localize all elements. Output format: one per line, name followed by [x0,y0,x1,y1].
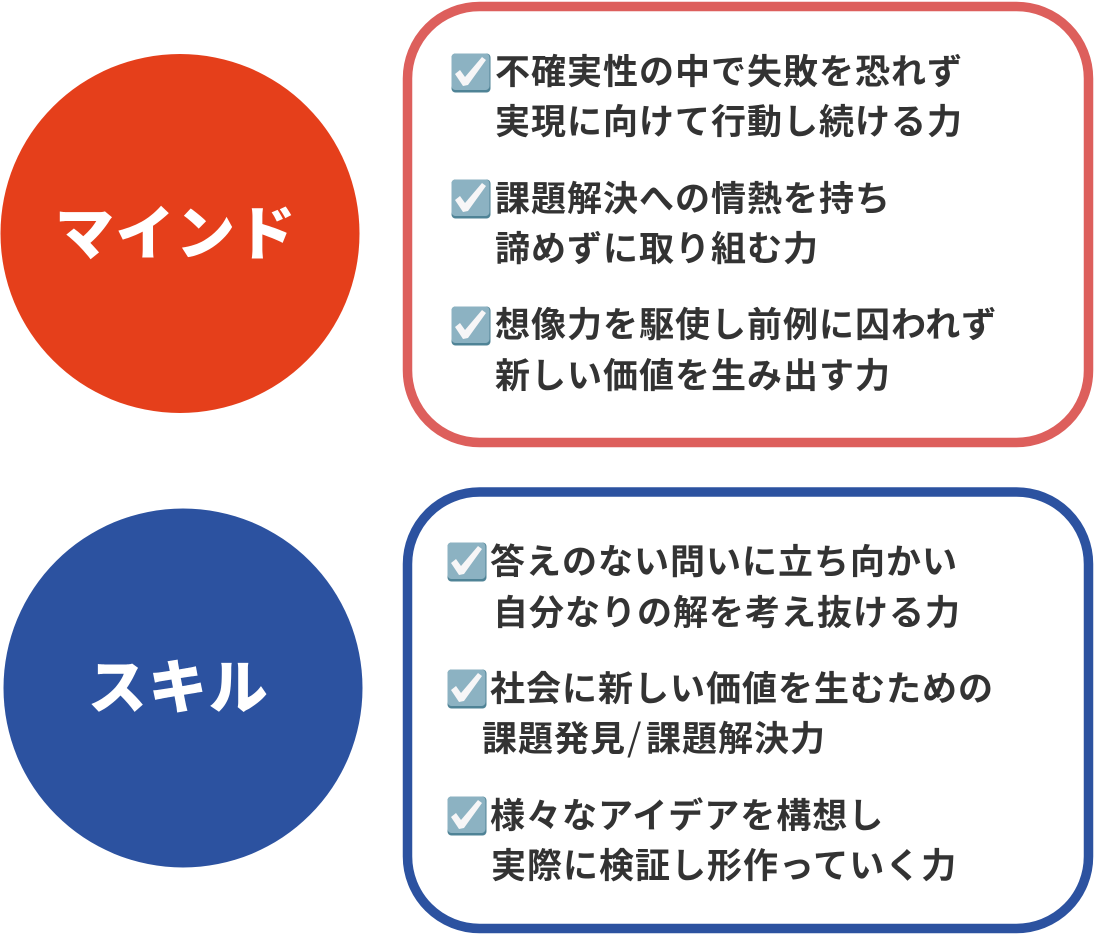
text block: mind item 1: 不確実性の中で失敗を恐れず [495,53,963,92]
text block: skill item 2: 課題解決力 [646,720,826,759]
icon: check mark 1 [452,54,490,92]
icon: check mark 4 [448,542,486,582]
heading: スキル: スキル [88,656,269,722]
text block: mind item 3 [495,306,997,396]
text block: skill item 3: 実際に検証し形作っていく力 [491,847,957,886]
text block: mind item 2: 諦めずに取り組む力 [495,230,819,269]
panel: マインド list [408,6,1088,442]
circle: マインド [0,54,360,413]
text block: skill item 1 [490,543,961,633]
text block: mind item 1 [495,53,963,142]
icon: check mark 3 [452,306,490,346]
text block: skill item 2: / [627,708,643,762]
panel: スキル list [408,492,1088,928]
text block: skill item 3: 様々なアイデアを構想し [490,796,884,836]
text block: mind item 2 [495,180,891,269]
text block: skill item 2: 社会に新しい価値を生むための [490,670,994,709]
heading: マインド: マインド [55,202,297,268]
text block: skill item 2 [482,670,994,762]
icon: check mark 2 [452,180,490,218]
text block: skill item 1: 自分なりの解を考え抜ける力 [493,594,961,633]
text block: skill item 2: 課題発見 [482,720,626,759]
icon: check mark 5 [448,670,486,708]
text block: mind item 2: 課題解決への情熱を持ち [495,180,891,219]
text block: mind item 1: 実現に向けて行動し続ける力 [495,103,963,142]
text block: skill item 3 [490,796,957,886]
text block: skill item 1: 答えのない問いに立ち向かい [490,543,958,582]
circle: スキル [4,508,362,868]
text block: mind item 3: 新しい価値を生み出す力 [495,357,891,396]
icon: check mark 6 [448,796,486,836]
text block: mind item 3: 想像力を駆使し前例に囚われず [495,306,997,345]
